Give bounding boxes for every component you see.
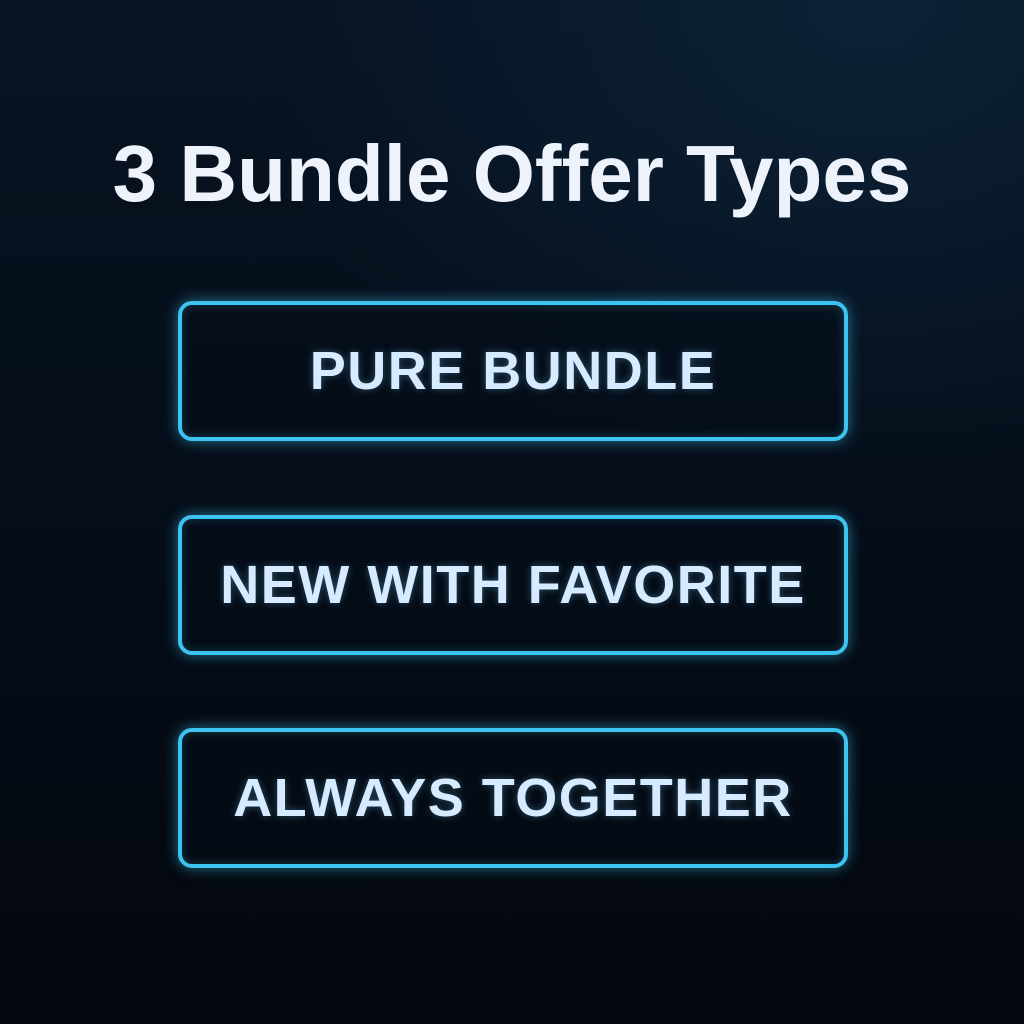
box: pure bundle bbox=[178, 301, 848, 441]
box: new with favorite bbox=[178, 515, 848, 655]
box: pure bundle: PURE BUNDLE bbox=[310, 341, 716, 401]
box: always together bbox=[178, 728, 848, 868]
box: always together: ALWAYS TOGETHER bbox=[233, 768, 793, 828]
box: new with favorite: NEW WITH FAVORITE bbox=[220, 555, 806, 615]
title: 3 Bundle Offer Types bbox=[113, 129, 911, 218]
